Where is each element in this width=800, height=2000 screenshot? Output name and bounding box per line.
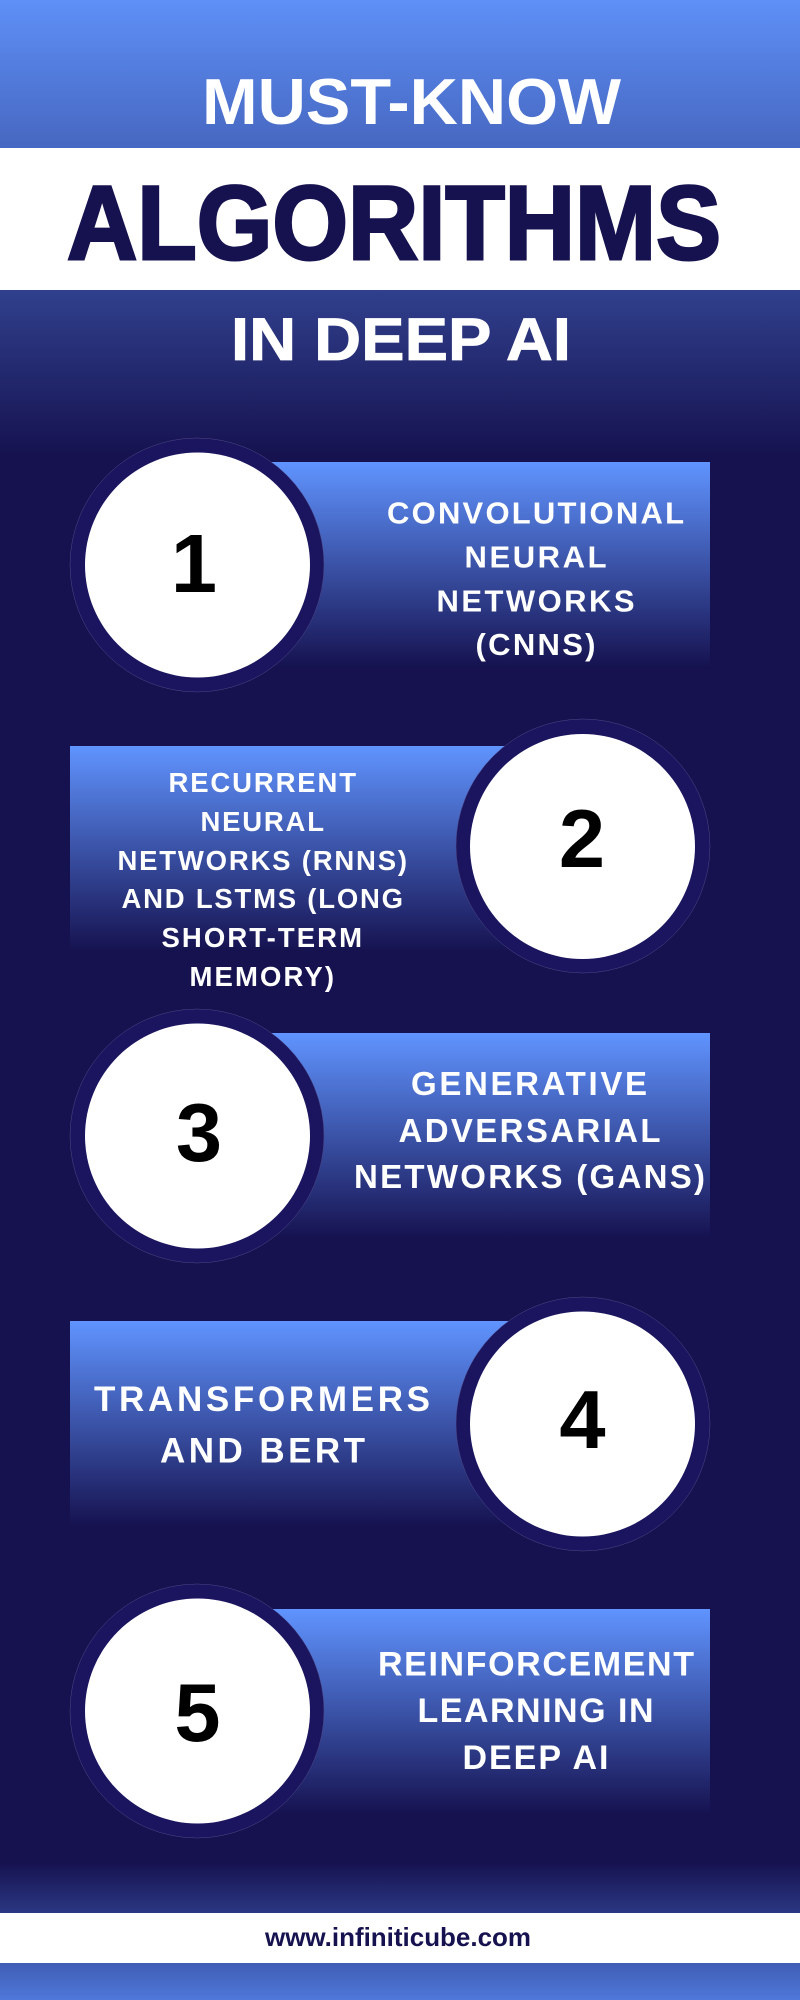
footer website: www.infiniticube.com	[264, 1922, 531, 1952]
item 3 label: GENERATIVE	[411, 1065, 647, 1102]
item 1 label: CONVOLUTIONAL	[387, 496, 684, 530]
item 2 number: 2	[559, 792, 605, 885]
item 2 bar	[70, 746, 583, 951]
item 2 label: NETWORKS (RNNS)	[118, 845, 407, 876]
item 4 label: TRANSFORMERS	[94, 1380, 430, 1419]
item 1 circle	[70, 438, 324, 692]
footer white band	[0, 1913, 800, 1963]
item 2 label: NEURAL	[200, 806, 324, 837]
item 1 label: (CNNS)	[476, 627, 596, 662]
item 3 bar	[197, 1033, 710, 1238]
item 5 label	[378, 1646, 694, 1777]
item 1 label: NETWORKS	[436, 584, 634, 618]
item 2 label	[118, 767, 407, 992]
panel: item 1	[70, 438, 710, 692]
footer gradient	[0, 1863, 800, 2000]
panel: item 3	[70, 1009, 710, 1263]
item 2 label: AND LSTMS (LONG	[122, 883, 403, 914]
item 5 circle	[70, 1584, 324, 1838]
item 2 circle	[456, 719, 710, 973]
item 2 label: SHORT-TERM	[162, 922, 362, 953]
item 1 label	[387, 496, 684, 662]
item 3 label	[354, 1065, 705, 1195]
heading: in deep ai: IN DEEP AI	[231, 306, 571, 373]
panel: item 5	[70, 1584, 710, 1838]
item 3 circle	[70, 1009, 324, 1263]
item 5 label: REINFORCEMENT	[378, 1646, 694, 1684]
item 4 label	[94, 1380, 430, 1470]
item 3 number: 3	[176, 1086, 222, 1179]
heading: must-know: MUST-KNOW	[202, 65, 622, 138]
item 5 number: 5	[174, 1666, 221, 1759]
panel: item 2	[70, 719, 710, 992]
item 5 bar	[197, 1609, 710, 1814]
item 1 number: 1	[171, 517, 217, 610]
item 5 label: DEEP AI	[462, 1739, 608, 1777]
item 5 label: LEARNING IN	[418, 1692, 654, 1730]
heading: algorithms: ALGORITHMS	[67, 165, 721, 282]
white title band	[0, 148, 800, 290]
item 4 circle	[456, 1297, 710, 1551]
item 1 label: NEURAL	[464, 540, 606, 574]
item 2 label: MEMORY)	[190, 961, 334, 992]
item 4 bar	[70, 1321, 583, 1526]
item 3 label: ADVERSARIAL	[398, 1112, 660, 1149]
header gradient	[0, 0, 800, 455]
item 4 number: 4	[559, 1373, 606, 1466]
item 2 label: RECURRENT	[168, 767, 356, 798]
item 1 bar	[197, 462, 710, 667]
item 4 label: AND BERT	[160, 1432, 365, 1470]
panel: item 4	[70, 1297, 710, 1551]
item 3 label: NETWORKS (GANS)	[354, 1158, 705, 1195]
